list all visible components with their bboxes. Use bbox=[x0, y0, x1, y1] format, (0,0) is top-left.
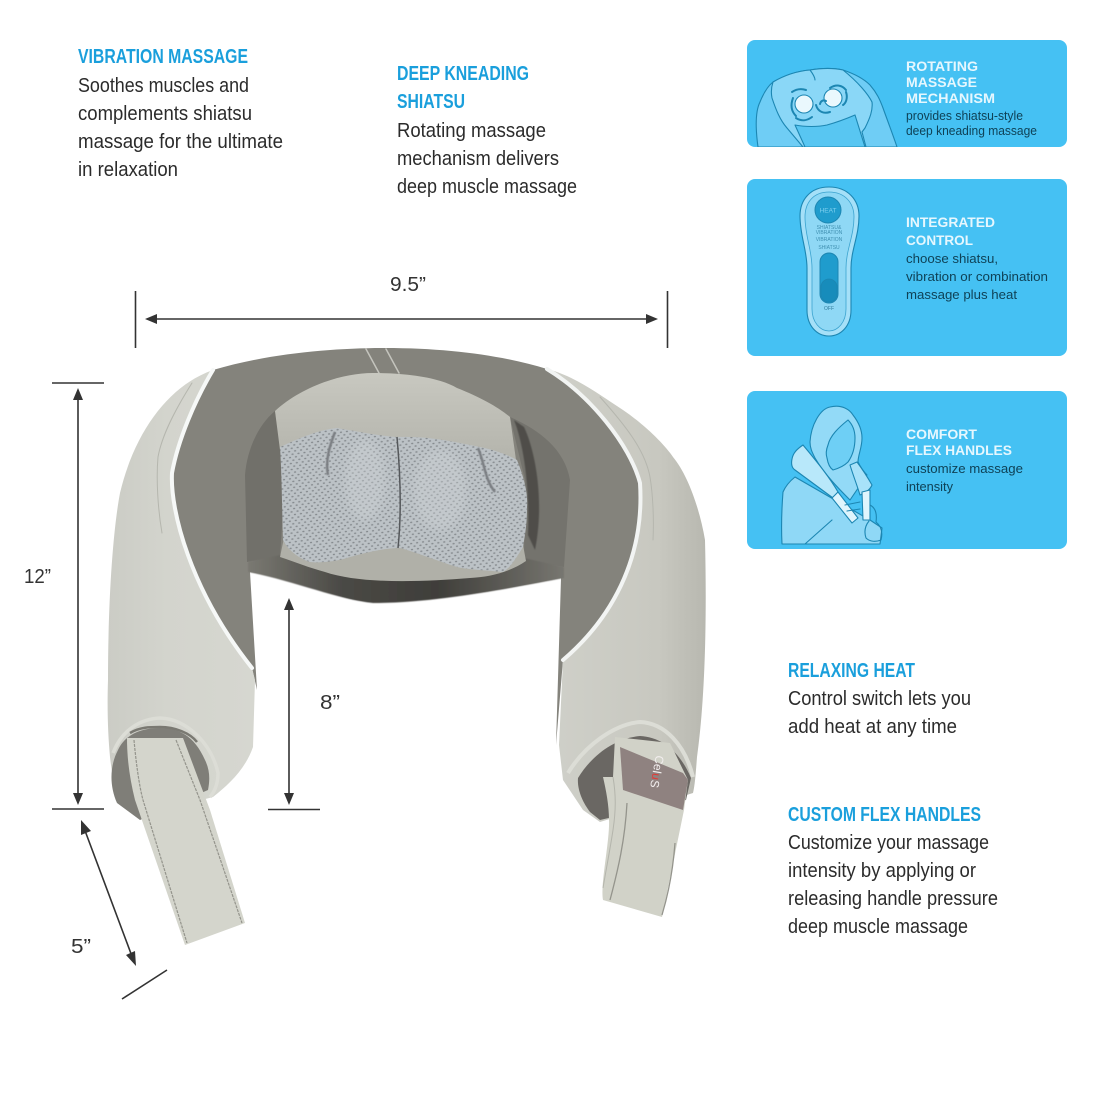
brand tag on handle: CeluS bbox=[647, 754, 667, 789]
text block: deep kneading shiatsu: mechanism delivers bbox=[397, 147, 559, 170]
lower band shadow bbox=[248, 555, 564, 603]
card text: comfort flex handles: intensity bbox=[906, 480, 954, 494]
icon: handheld controller: OFF bbox=[824, 306, 834, 312]
card text: rotating massage mechanism bbox=[906, 59, 1037, 138]
text block: relaxing heat: add heat at any time bbox=[788, 715, 957, 738]
massager body: dark upper band bbox=[172, 348, 640, 745]
brand tag on handle bbox=[620, 747, 688, 810]
dimension: width 9.5 inches bbox=[136, 274, 668, 348]
left flex handle bbox=[127, 738, 245, 945]
mesh shiatsu nodes bbox=[280, 428, 527, 572]
dimension: height 12 inches bbox=[24, 383, 104, 809]
panel: integrated control bbox=[747, 179, 1067, 356]
card text: comfort flex handles: FLEX HANDLES bbox=[906, 443, 1012, 458]
icon: massager with rotating nodes bbox=[756, 68, 897, 147]
card text: rotating massage mechanism: ROTATING bbox=[906, 59, 978, 74]
text block: custom flex handles: CUSTOM FLEX HANDLES bbox=[788, 804, 981, 826]
card text: rotating massage mechanism: MASSAGE bbox=[906, 75, 977, 90]
lower inner cushion bbox=[280, 538, 526, 581]
right arm end opening bbox=[568, 722, 693, 820]
text block: custom flex handles: intensity by applying or bbox=[788, 859, 976, 882]
card text: integrated control bbox=[906, 215, 1048, 302]
card text: integrated control: massage plus heat bbox=[906, 288, 1018, 302]
text block: custom flex handles bbox=[788, 804, 998, 938]
upper neck cushion bbox=[275, 373, 516, 460]
card text: integrated control: vibration or combination bbox=[906, 270, 1048, 284]
dimension: depth 5 inches: 5” bbox=[71, 936, 91, 958]
text block: vibration massage: VIBRATION MASSAGE bbox=[78, 46, 248, 68]
panel: rotating massage mechanism bbox=[747, 40, 1067, 147]
massager left arm bbox=[108, 370, 255, 817]
dimension: opening 8 inches: 8” bbox=[320, 692, 340, 714]
card text: rotating massage mechanism: provides shiatsu-style bbox=[906, 109, 1023, 123]
card text: comfort flex handles: customize massage bbox=[906, 462, 1023, 476]
text block: deep kneading shiatsu: Rotating massage bbox=[397, 119, 546, 142]
white piping stripes and seams bbox=[157, 349, 653, 668]
text block: deep kneading shiatsu: deep muscle massage bbox=[397, 175, 577, 198]
text block: deep kneading shiatsu: SHIATSU bbox=[397, 91, 465, 113]
card text: comfort flex handles bbox=[906, 427, 1023, 494]
text block: vibration massage: massage for the ultimate bbox=[78, 130, 283, 153]
text block: deep kneading shiatsu bbox=[397, 63, 577, 198]
text block: vibration massage: Soothes muscles and bbox=[78, 74, 249, 97]
dimension: depth 5 inches bbox=[71, 820, 167, 999]
dimension: height 12 inches: 12” bbox=[24, 566, 51, 588]
card text: integrated control: choose shiatsu, bbox=[906, 252, 998, 266]
text block: relaxing heat bbox=[788, 660, 971, 738]
icon: handheld controller: VIBRATION bbox=[816, 230, 843, 236]
inner shell panels bbox=[245, 411, 285, 562]
card text: integrated control: INTEGRATED bbox=[906, 215, 995, 230]
card text: integrated control: CONTROL bbox=[906, 233, 973, 248]
left arm end opening bbox=[111, 718, 218, 820]
text block: vibration massage: in relaxation bbox=[78, 158, 178, 181]
text block: custom flex handles: releasing handle pressure bbox=[788, 887, 998, 910]
card text: rotating massage mechanism: deep kneading massage bbox=[906, 124, 1037, 138]
icon: handheld controller: VIBRATION bbox=[816, 237, 843, 243]
card text: rotating massage mechanism: MECHANISM bbox=[906, 91, 995, 106]
text block: relaxing heat: RELAXING HEAT bbox=[788, 660, 915, 682]
text block: vibration massage: complements shiatsu bbox=[78, 102, 252, 125]
icon: handheld controller: HEAT bbox=[820, 208, 836, 214]
text block: custom flex handles: Customize your massage bbox=[788, 831, 989, 854]
right flex handle bbox=[602, 737, 688, 917]
card text: comfort flex handles: COMFORT bbox=[906, 427, 978, 442]
text block: deep kneading shiatsu: DEEP KNEADING bbox=[397, 63, 529, 85]
dimension: opening 8 inches bbox=[268, 598, 340, 810]
icon: woman using massager bbox=[782, 406, 882, 544]
product: neck massager bbox=[108, 348, 706, 945]
massager right arm bbox=[547, 369, 706, 822]
dimension: width 9.5 inches: 9.5” bbox=[390, 274, 426, 296]
text block: vibration massage bbox=[78, 46, 283, 181]
icon: handheld controller: SHIATSU bbox=[818, 245, 840, 251]
panel: comfort flex handles bbox=[747, 391, 1067, 549]
text block: custom flex handles: deep muscle massage bbox=[788, 915, 968, 938]
text block: relaxing heat: Control switch lets you bbox=[788, 687, 971, 710]
icon: handheld controller bbox=[800, 187, 859, 336]
icon: handheld controller: SHIATSU& bbox=[817, 225, 842, 231]
